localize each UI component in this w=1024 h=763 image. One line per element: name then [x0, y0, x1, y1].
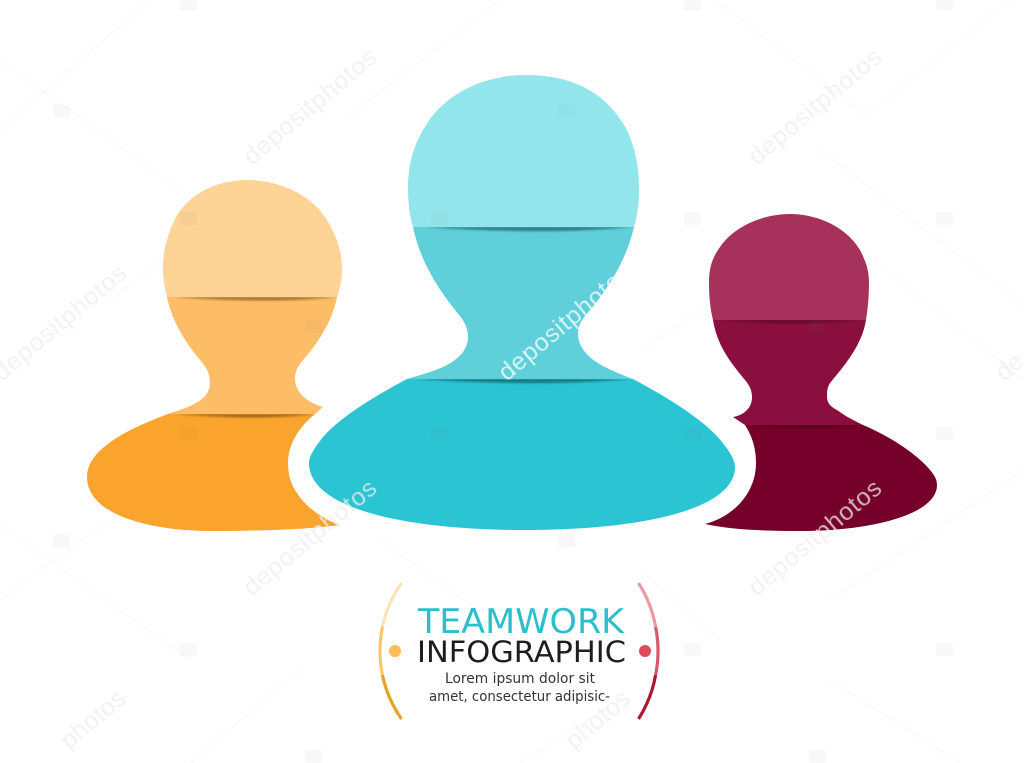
watermark text: depositphotos	[743, 43, 887, 171]
description text: amet, consectetur adipisic-	[429, 689, 610, 705]
left figure neck segment	[167, 297, 337, 414]
left figure body segment	[80, 414, 350, 534]
description text	[429, 671, 610, 705]
right figure shadow lower	[750, 425, 860, 428]
centre figure head segment	[408, 75, 639, 227]
figure: centre teal person	[300, 70, 745, 534]
description text: Lorem ipsum dolor sit	[445, 671, 595, 687]
right figure neck segment	[713, 320, 866, 425]
subtitle: INFOGRAPHIC: INFOGRAPHIC	[417, 635, 626, 669]
left figure shadow lower	[175, 414, 315, 418]
figure: left orange person	[80, 175, 350, 534]
centre figure shadow lower	[415, 379, 630, 383]
watermark text: depositphotos	[493, 259, 637, 387]
watermark text: photos	[55, 684, 131, 755]
watermark text: depositphotos	[238, 43, 382, 171]
title: TEAMWORK: TEAMWORK	[417, 602, 626, 642]
right figure shadow upper	[718, 320, 862, 323]
right figure body segment	[700, 425, 945, 535]
right figure head segment	[709, 214, 869, 320]
figure: right maroon person	[700, 210, 945, 535]
watermark text: depositphotos	[743, 474, 887, 602]
right dot	[639, 645, 651, 657]
right bracket arc	[638, 583, 658, 719]
left bracket arc	[380, 583, 402, 719]
left figure head segment	[163, 180, 342, 297]
centre figure neck segment	[407, 227, 634, 379]
centre figure body segment	[300, 379, 745, 534]
watermark text: photos	[560, 684, 636, 755]
centre figure shadow upper	[425, 227, 632, 231]
left figure shadow upper	[172, 297, 335, 300]
watermark text: depositphotos	[238, 474, 382, 602]
left dot	[389, 645, 401, 657]
